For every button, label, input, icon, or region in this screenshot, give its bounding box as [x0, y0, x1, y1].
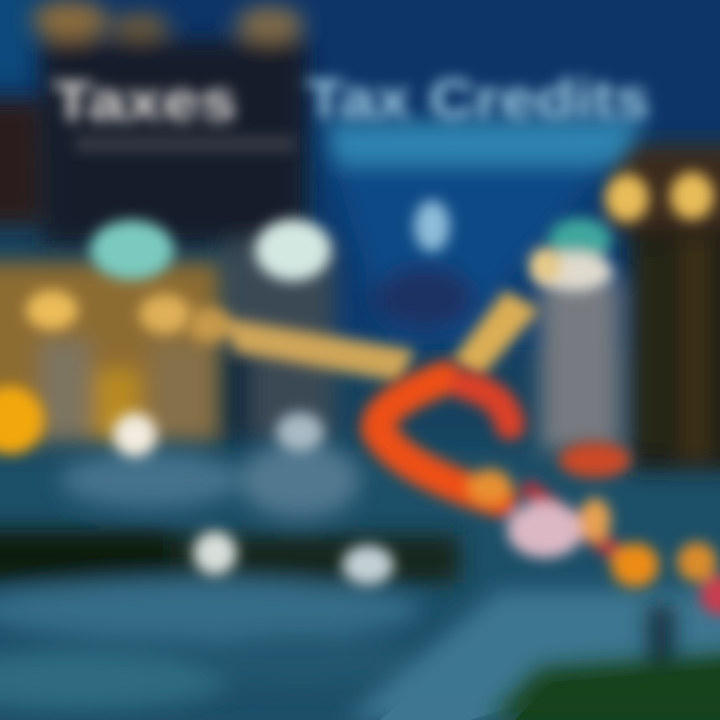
- icons: round lights and domes: [0, 172, 714, 454]
- title: [52, 67, 650, 152]
- background base: [0, 400, 720, 720]
- white lights: [113, 412, 394, 585]
- lawn: [490, 605, 720, 720]
- arrow: gold beams: [188, 247, 561, 382]
- funnel: blue triangle: [325, 118, 645, 340]
- building: right tower: [540, 145, 720, 470]
- arrow: red orange curve: [378, 378, 720, 615]
- terraces: lower steps: [0, 442, 720, 720]
- title: Taxes: [52, 69, 237, 132]
- building: dark left tower: [0, 0, 335, 440]
- title: Tax Credits: [305, 67, 650, 130]
- building: left gold facade: [0, 262, 220, 442]
